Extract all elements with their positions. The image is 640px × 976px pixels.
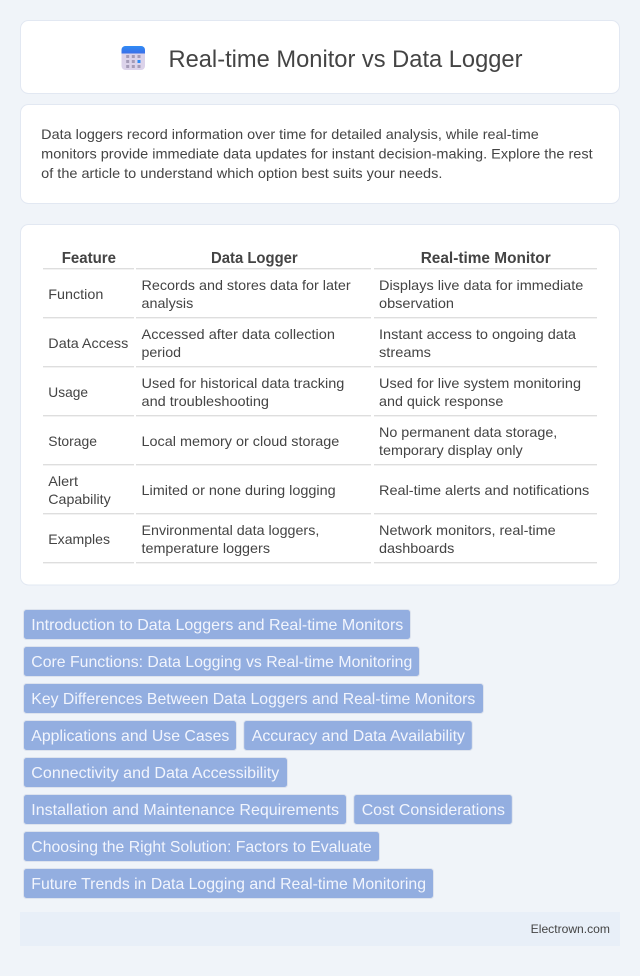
- intro text: [41, 126, 593, 181]
- row: Function: Function: [48, 286, 103, 302]
- row: Usage: Usage: [48, 384, 88, 400]
- row: Storage: temporary display only: [379, 442, 523, 458]
- row: Storage: Storage: [48, 433, 97, 449]
- tag: introduction: Introduction to Data Loggers and Real-time Monitors: [31, 617, 403, 634]
- tag: choosing: [24, 832, 380, 862]
- row: Examples: Environmental data loggers,: [142, 522, 319, 538]
- tag: key differences: Key Differences Between Data Loggers and Real-time Monitors: [31, 691, 475, 708]
- row: Alert Capability: Limited or none during logging: [142, 482, 336, 498]
- icon: calendar grid: [122, 46, 145, 70]
- panel: title header: [20, 20, 620, 94]
- table header row: [43, 250, 597, 269]
- row: Alert Capability: Alert: [48, 473, 78, 489]
- tag: connectivity: [24, 758, 288, 788]
- tag: key differences: [24, 684, 484, 714]
- panel: introduction: [20, 104, 620, 204]
- row: Function: Displays live data for immediate: [379, 277, 584, 293]
- row: Usage: [43, 375, 597, 416]
- row: Function: [43, 277, 597, 318]
- row: Function: Records and stores data for later: [142, 277, 351, 293]
- tag: introduction: [24, 610, 410, 640]
- row: Alert Capability: [43, 473, 597, 514]
- row: Data Access: period: [142, 344, 181, 360]
- intro text: Data loggers record information over time for detailed analysis, while real-time: [41, 126, 539, 142]
- row: Examples: Examples: [48, 531, 110, 547]
- row: Data Access: Instant access to ongoing data: [379, 326, 576, 342]
- row: Examples: [43, 522, 597, 563]
- row: Alert Capability: Capability: [48, 491, 111, 507]
- row: Alert Capability: Real-time alerts and notifications: [379, 482, 589, 498]
- tag: cost: Cost Considerations: [362, 802, 505, 819]
- footer: [20, 912, 620, 946]
- title: Real-time Monitor vs Data Logger: [168, 46, 522, 73]
- tag: applications: Applications and Use Cases: [31, 728, 229, 745]
- row: Data Access: Accessed after data collection: [142, 326, 335, 342]
- row: Usage: Used for live system monitoring: [379, 375, 581, 391]
- row: Usage: and quick response: [379, 393, 504, 409]
- tag: connectivity: Connectivity and Data Accessibility: [31, 765, 279, 782]
- row: Usage: Used for historical data tracking: [142, 375, 344, 391]
- row: Storage: Local memory or cloud storage: [142, 433, 340, 449]
- table header row: Real-time Monitor: [421, 250, 551, 267]
- row: Data Access: [43, 326, 597, 367]
- tag: core functions: [24, 646, 420, 676]
- footer: Electrown.com: [531, 922, 610, 936]
- tag: future trends: [24, 868, 434, 898]
- row: Function: analysis: [142, 295, 193, 311]
- tag: choosing: Choosing the Right Solution: Factors to Evaluate: [31, 839, 372, 856]
- tag: future trends: Future Trends in Data Logging and Real-time Monitoring: [31, 876, 426, 893]
- tag: accuracy: [244, 720, 472, 750]
- panel: topic tags: [24, 610, 512, 898]
- row: Examples: dashboards: [379, 540, 454, 556]
- table header row: Feature: [62, 250, 116, 267]
- row: Examples: Network monitors, real-time: [379, 522, 556, 538]
- row: Examples: temperature loggers: [142, 540, 270, 556]
- tag: core functions: Core Functions: Data Logging vs Real-time Monitoring: [31, 654, 412, 671]
- row: Data Access: Data Access: [48, 335, 128, 351]
- tag: applications: [24, 720, 236, 750]
- panel: comparison table: [20, 224, 620, 585]
- tag: installation: [24, 794, 346, 824]
- row: Storage: [43, 424, 597, 465]
- table header row: Data Logger: [211, 250, 298, 267]
- row: Usage: and troubleshooting: [142, 393, 269, 409]
- intro text: monitors provide immediate data updates for instant decision-making. Explore the rest: [41, 146, 593, 162]
- tag: accuracy: Accuracy and Data Availability: [252, 728, 465, 745]
- tag: cost: [354, 794, 512, 824]
- row: Storage: No permanent data storage,: [379, 424, 557, 440]
- row: Function: observation: [379, 295, 454, 311]
- intro text: of the article to understand which option best suits your needs.: [41, 165, 442, 181]
- row: Data Access: streams: [379, 344, 431, 360]
- tag: installation: Installation and Maintenance Requirements: [31, 802, 339, 819]
